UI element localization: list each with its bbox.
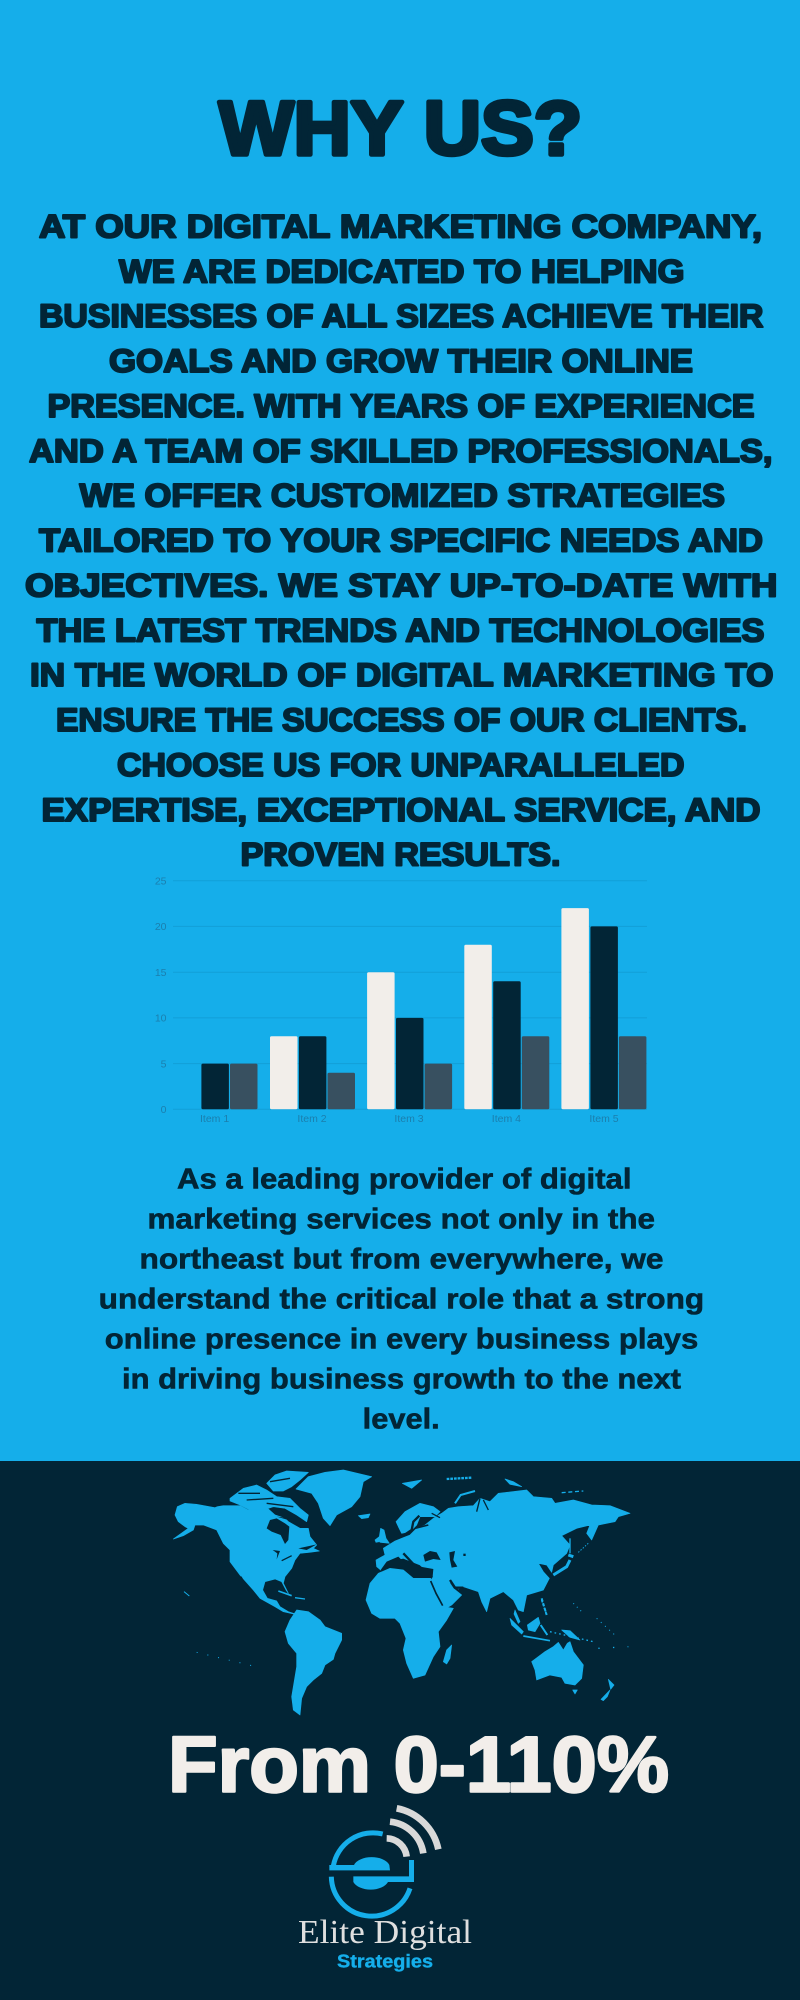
text block: intro heading paragraph: WE OFFER CUSTOMIZED STRATEGIES xyxy=(80,478,725,514)
text block: intro heading paragraph: IN THE WORLD OF DIGITAL MARKETING TO xyxy=(30,657,774,693)
text block: intro heading paragraph: BUSINESSES OF ALL SIZES ACHIEVE THEIR xyxy=(39,298,764,334)
text block: intro heading paragraph: PROVEN RESULTS. xyxy=(240,837,560,873)
text block: intro heading paragraph: EXPERTISE, EXCEPTIONAL SERVICE, AND xyxy=(42,792,761,828)
text block: provider paragraph: level. xyxy=(363,1403,440,1435)
bar chart: 5 xyxy=(161,1058,167,1070)
icon: e with wifi arcs xyxy=(329,1808,438,1916)
text block: intro heading paragraph: PRESENCE. WITH YEARS OF EXPERIENCE xyxy=(48,388,754,424)
world map xyxy=(173,1470,630,1715)
map: North America and Greenland xyxy=(173,1470,372,1615)
bar chart: Item 4 xyxy=(492,1113,521,1125)
bar chart: 20 xyxy=(155,921,167,933)
text block: provider paragraph: northeast but from everywhere, we xyxy=(140,1243,664,1275)
text block: intro heading paragraph: TAILORED TO YOUR SPECIFIC NEEDS AND xyxy=(39,523,763,559)
logo: Elite Digital Strategies xyxy=(298,1808,472,1972)
logo tagline: Strategies xyxy=(337,1951,433,1972)
bar chart: Item 2 xyxy=(297,1113,327,1125)
big stat: From 0-110%: From 0-110% xyxy=(168,1720,669,1808)
text block: intro heading paragraph: CHOOSE US FOR UNPARALLELED xyxy=(117,747,684,783)
text block: provider paragraph: marketing services not only in the xyxy=(148,1203,655,1235)
bar chart: 25 xyxy=(155,876,167,888)
text block: intro heading paragraph: OBJECTIVES. WE STAY UP-TO-DATE WITH xyxy=(25,568,778,604)
bar chart: 0 xyxy=(161,1104,167,1116)
text block: intro heading paragraph xyxy=(25,208,778,873)
text block: intro heading paragraph: GOALS AND GROW THEIR ONLINE xyxy=(109,343,693,379)
map: Australia and Southeast Asia xyxy=(510,1600,628,1701)
map: Eurasia xyxy=(375,1478,630,1615)
bar chart: Item 5 xyxy=(589,1113,619,1125)
map: Africa, South America, Madagascar xyxy=(285,1568,453,1715)
title: WHY US? xyxy=(219,86,582,172)
logo wordmark: Elite Digital xyxy=(298,1914,472,1951)
bar chart: Item 1 xyxy=(200,1113,229,1125)
bar chart xyxy=(155,876,647,1125)
text block: intro heading paragraph: ENSURE THE SUCCESS OF OUR CLIENTS. xyxy=(56,702,747,738)
text block: provider paragraph: online presence in every business plays xyxy=(105,1323,698,1355)
text block: intro heading paragraph: AND A TEAM OF SKILLED PROFESSIONALS, xyxy=(29,433,772,469)
text block: intro heading paragraph: AT OUR DIGITAL MARKETING COMPANY, xyxy=(39,208,762,244)
map: Pacific island dots xyxy=(197,1652,253,1666)
bar chart: Item 3 xyxy=(394,1113,424,1125)
text block: provider paragraph: understand the critical role that a strong xyxy=(99,1283,704,1315)
text block: provider paragraph xyxy=(99,1163,704,1435)
bar chart: 15 xyxy=(155,967,167,979)
bar chart: 10 xyxy=(155,1013,167,1025)
text block: intro heading paragraph: WE ARE DEDICATED TO HELPING xyxy=(119,253,684,289)
text block: provider paragraph: in driving business growth to the next xyxy=(122,1363,682,1395)
text block: intro heading paragraph: THE LATEST TRENDS AND TECHNOLOGIES xyxy=(36,612,764,648)
text block: provider paragraph: As a leading provider of digital xyxy=(177,1163,632,1195)
